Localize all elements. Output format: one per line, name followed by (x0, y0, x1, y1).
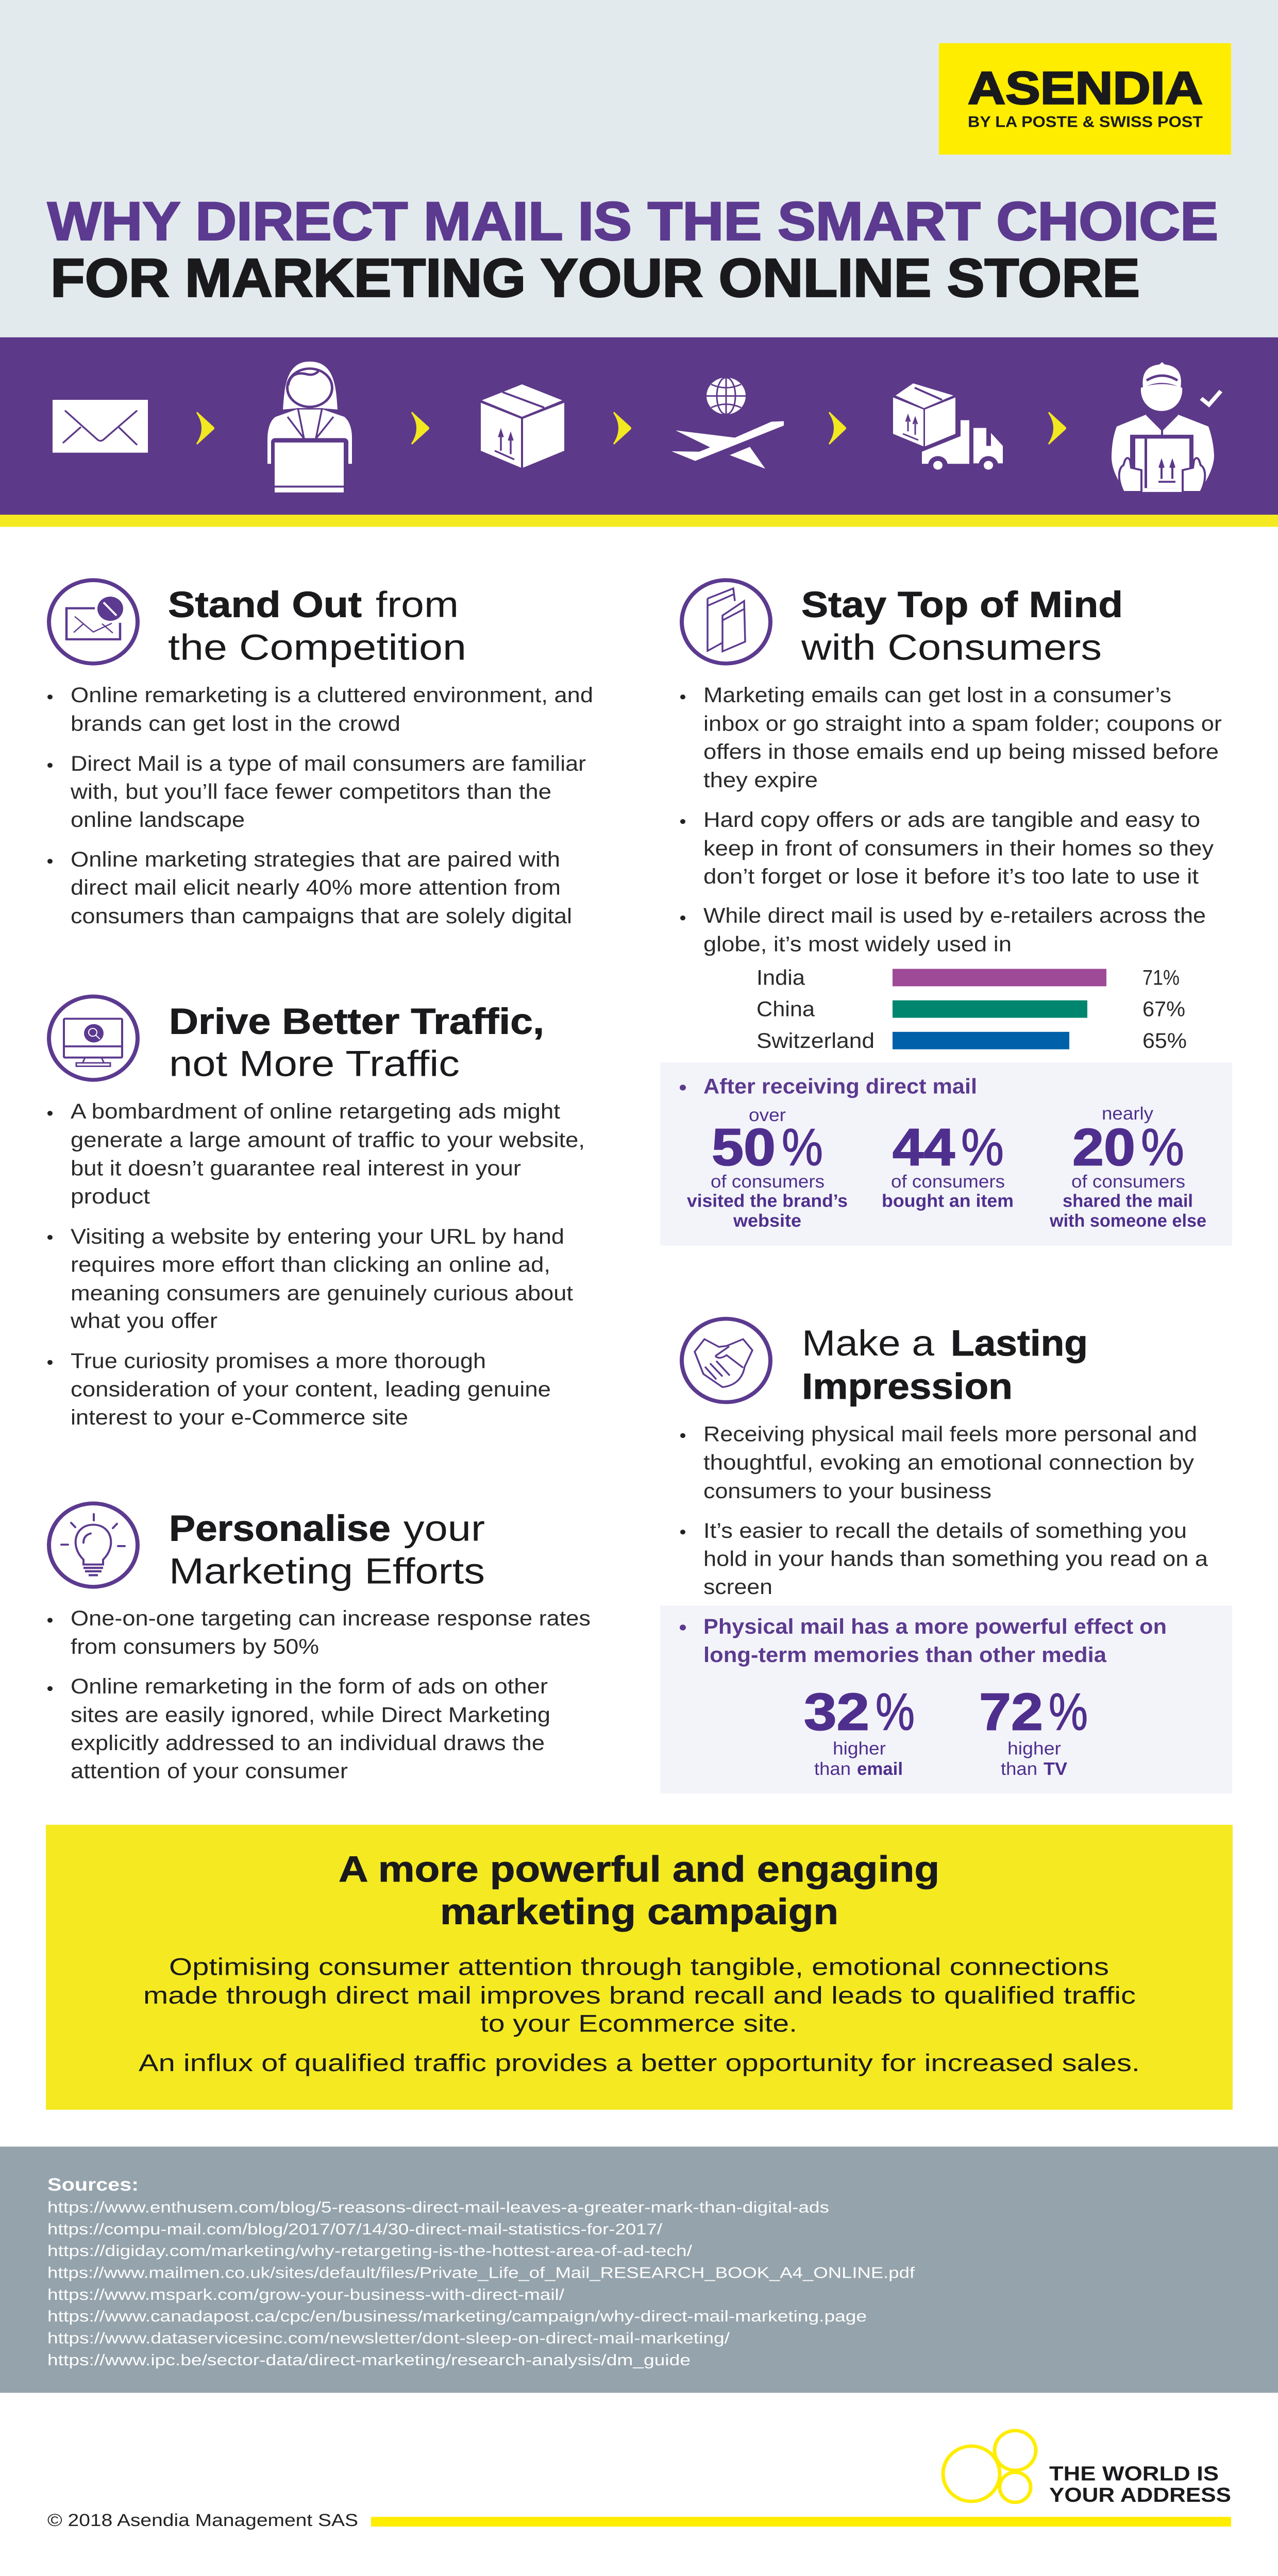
stat: 20%: % (1141, 1117, 1184, 1176)
callout: long-term memories (660, 1606, 1232, 1793)
bar chart: Switzerland (756, 1029, 875, 1053)
bullet list: direct mail elicit nearly 40% more attention from (71, 876, 561, 900)
stat: 32% (804, 1682, 915, 1778)
heading (169, 1001, 544, 1083)
logo: the world is your address (943, 2431, 1231, 2506)
stat: 50%: visited the brand’s (687, 1191, 848, 1211)
panel: Stand Out from the Competition (47, 580, 593, 928)
bullet list: sites are easily ignored, while Direct Marketing (71, 1703, 550, 1727)
bullet list (680, 1422, 1208, 1599)
source links: https://digiday.com/marketing/why-retargeting-is-the-hottest-area-of-ad-tech/ (47, 2242, 692, 2260)
bullet list: Marketing emails can get lost in a consumer’s (703, 683, 1171, 707)
source links: https://compu-mail.com/blog/2017/07/14/30-direct-mail-statistics-for-2017/ (47, 2221, 662, 2238)
heading: Impression (802, 1366, 1013, 1406)
icon: handshake (682, 1319, 770, 1402)
bullet list: Hard copy offers or ads are tangible and easy to (703, 808, 1200, 832)
bullet list: offers in those emails end up being missed before (703, 740, 1219, 764)
heading: Marketing Efforts (169, 1550, 485, 1591)
bullet list: consideration of your content, leading genuine (71, 1378, 551, 1401)
bullet list (47, 683, 593, 928)
icon: envelope (53, 400, 148, 453)
heading: from (376, 584, 459, 625)
bullet list: generate a large amount of traffic to your website, (71, 1128, 585, 1152)
arrow (1048, 412, 1066, 445)
icon: woman with laptop (267, 362, 352, 496)
stat: 20%: with someone else (1049, 1211, 1206, 1231)
stat: 20%: shared the mail (1063, 1191, 1193, 1211)
bullet list: A bombardment of online retargeting ads might (71, 1100, 560, 1124)
heading (339, 1849, 939, 1932)
stat: 32%: 32 (804, 1682, 869, 1741)
heading: Lasting (951, 1323, 1088, 1363)
bullet list: explicitly addressed to an individual draws the (71, 1731, 545, 1755)
heading (169, 1508, 485, 1591)
header background (0, 0, 1278, 337)
logo: the world is your address: YOUR ADDRESS (1049, 2483, 1231, 2506)
stat: 44% (882, 1117, 1014, 1211)
callout: long-term memories: long-term memories than other media (703, 1643, 1107, 1667)
bullet list: One-on-one targeting can increase response rates (71, 1607, 591, 1631)
copyright: © 2018 Asendia Management SAS (47, 2510, 358, 2530)
bullet list: Visiting a website by entering your URL by hand (71, 1225, 564, 1248)
stat: 32%: higher (833, 1738, 886, 1758)
stat: 20%: 20 (1072, 1117, 1135, 1176)
logo: Asendia: BY LA POSTE & SWISS POST (968, 113, 1203, 130)
panel: Drive Better Traffic (47, 996, 585, 1429)
bar chart: 65% (1142, 1029, 1187, 1053)
logo: the world is your address: THE WORLD IS (1049, 2462, 1219, 2485)
bullet list (47, 1607, 591, 1783)
bullet list: brands can get lost in the crowd (71, 712, 400, 736)
source links: https://www.ipc.be/sector-data/direct-marketing/research-analysis/dm_guide (47, 2351, 691, 2368)
source links: https://www.enthusem.com/blog/5-reasons-direct-mail-leaves-a-greater-mark-than-digital-ads (47, 2198, 829, 2216)
stat: 50%: over (749, 1105, 786, 1125)
stat: 72%: 72 (979, 1682, 1043, 1741)
bullet list: True curiosity promises a more thorough (71, 1349, 486, 1373)
stat: 72% (979, 1682, 1088, 1778)
bullet list: meaning consumers are genuinely curious about (71, 1281, 573, 1305)
heading: Make a (802, 1323, 934, 1363)
stat: 32%: than (814, 1759, 851, 1778)
text block: An influx of qualified traffic provides a better opportunity for increased sales. (139, 2049, 1140, 2076)
callout: after receiving direct mail: After receiving direct mail (703, 1075, 977, 1098)
source links: https://www.canadapost.ca/cpc/en/business/marketing/campaign/why-direct-mail-marketing.page (47, 2308, 867, 2325)
heading: your (403, 1508, 485, 1549)
heading: not More Traffic (169, 1043, 460, 1083)
stat: 44%: of consumers (891, 1172, 1005, 1191)
stat: 44%: bought an item (882, 1191, 1014, 1211)
icon: parcel box (481, 384, 564, 468)
source links: https://www.dataservicesinc.com/newsletter/dont-sleep-on-direct-mail-marketing/ (47, 2329, 730, 2347)
bullet list: consumers than campaigns that are solely digital (71, 904, 572, 928)
heading: the Competition (168, 626, 466, 667)
panel: sources: Sources: (47, 2175, 139, 2195)
bullet list: from consumers by 50% (71, 1635, 319, 1658)
stat: 50% (687, 1105, 848, 1231)
title (47, 191, 1218, 308)
text block: made through direct mail improves brand recall and leads to qualified traffic (143, 1982, 1136, 2009)
icon: parcel on delivery truck (893, 383, 1003, 474)
source links: https://www.mspark.com/grow-your-business-with-direct-mail/ (47, 2286, 564, 2303)
arrow (196, 412, 214, 445)
bullet list: requires more effort than clicking an online ad, (71, 1253, 550, 1277)
title: WHY DIRECT MAIL IS THE SMART CHOICE (47, 191, 1218, 251)
bar chart: 67% (1142, 997, 1185, 1021)
stat: 72%: % (1049, 1682, 1088, 1741)
panel: purple process banner (0, 337, 1278, 527)
bullet list (680, 683, 1222, 956)
stat: 50%: of consumers (711, 1172, 825, 1191)
bullet list: what you offer (70, 1309, 217, 1333)
heading: Personalise (169, 1508, 391, 1549)
icon: light bulb (49, 1503, 138, 1587)
text block: Optimising consumer attention through tangible, emotional connections (169, 1953, 1109, 1980)
heading: A more powerful and engaging (339, 1849, 939, 1889)
bullet list: Direct Mail is a type of mail consumers are familiar (71, 752, 586, 775)
bullet list: globe, it’s most widely used in (703, 933, 1012, 956)
stat: 50%: 50 (712, 1117, 776, 1176)
icon: monitor with magnifier (49, 996, 138, 1080)
title: FOR MARKETING YOUR ONLINE STORE (51, 248, 1140, 308)
panel: sources (0, 2147, 1278, 2393)
bullet list: Online marketing strategies that are paired with (71, 848, 560, 871)
bullet list: don’t forget or lose it before it’s too late to use it (703, 865, 1199, 888)
stat: 50%: % (782, 1117, 823, 1176)
bullet list: they expire (703, 768, 818, 792)
text block (139, 1953, 1140, 2076)
bullet list: screen (703, 1575, 772, 1599)
bar chart (756, 966, 1187, 1053)
source links: https://www.mailmen.co.uk/sites/default/files/Private_Life_of_Mail_RESEARCH_BOOK_A4_ONLINE.pdf (47, 2264, 915, 2281)
stat: 72%: TV (1044, 1759, 1067, 1778)
bullet list: hold in your hands than something you read on a (703, 1547, 1208, 1571)
heading: Stand Out (168, 584, 362, 625)
bullet list: with, but you’ll face fewer competitors than the (70, 780, 551, 804)
bullet list: interest to your e-Commerce site (71, 1405, 408, 1429)
bullet list: Online remarketing in the form of ads on other (71, 1674, 548, 1698)
bar chart: China (756, 997, 815, 1021)
stat: 32%: email (857, 1759, 903, 1778)
heading (801, 584, 1123, 667)
source links (47, 2198, 915, 2368)
callout: after receiving direct mail (660, 1062, 1232, 1246)
footer yellow bar (371, 2517, 1231, 2527)
arrow (829, 412, 846, 445)
heading: Drive Better Traffic, (169, 1001, 544, 1042)
panel: Personalise your Marketing Efforts (47, 1503, 591, 1783)
icon: globe and plane (671, 378, 784, 469)
stat: 72%: higher (1007, 1738, 1061, 1758)
bullet list: While direct mail is used by e-retailers across the (703, 904, 1206, 928)
panel: Make a Lasting Impression (660, 1319, 1232, 1793)
bar chart: 71% (1142, 966, 1180, 990)
bullet list: It’s easier to recall the details of something you (703, 1519, 1187, 1543)
heading: marketing campaign (440, 1891, 838, 1932)
stat: 72%: than (1001, 1759, 1037, 1778)
stat: 20%: of consumers (1071, 1172, 1185, 1191)
heading (168, 584, 466, 667)
panel: yellow conclusion callout (46, 1825, 1233, 2110)
bullet list: Online remarketing is a cluttered environment, and (71, 683, 593, 707)
heading (802, 1323, 1088, 1406)
heading: Stay Top of Mind (801, 584, 1123, 625)
callout: long-term memories: Physical mail has a more powerful effect on (703, 1615, 1167, 1639)
bullet list (47, 1100, 585, 1429)
bullet list: online landscape (71, 808, 245, 832)
bullet list: attention of your consumer (71, 1759, 348, 1783)
stat: 44%: 44 (893, 1117, 955, 1176)
arrow (613, 412, 631, 445)
logo: Asendia (939, 43, 1231, 155)
icon: envelope with pen (49, 580, 138, 664)
text block: to your Ecommerce site. (480, 2010, 797, 2037)
bullet list: product (71, 1184, 150, 1208)
stat: 50%: website (733, 1211, 801, 1231)
bullet list: inbox or go straight into a spam folder; coupons or (703, 712, 1222, 736)
icon: courier holding parcel (1112, 362, 1221, 492)
bullet list: Receiving physical mail feels more personal and (703, 1422, 1197, 1446)
bullet list: keep in front of consumers in their homes so they (703, 837, 1214, 860)
stat: 20%: nearly (1102, 1104, 1153, 1124)
bullet list: thoughtful, evoking an emotional connection by (703, 1451, 1194, 1475)
stat: 32%: % (876, 1682, 915, 1741)
bullet list: consumers to your business (703, 1479, 991, 1503)
heading: with Consumers (801, 626, 1102, 667)
logo: Asendia: ASENDIA (968, 62, 1203, 114)
icon: mail envelopes (682, 580, 770, 664)
stat: 20% (1049, 1104, 1206, 1231)
stat: 44%: % (961, 1117, 1004, 1176)
bullet list: but it doesn’t guarantee real interest in your (71, 1157, 521, 1180)
arrow (411, 412, 429, 445)
panel: Stay Top of Mind with Consumers (660, 580, 1232, 1246)
bar chart: India (756, 966, 805, 990)
